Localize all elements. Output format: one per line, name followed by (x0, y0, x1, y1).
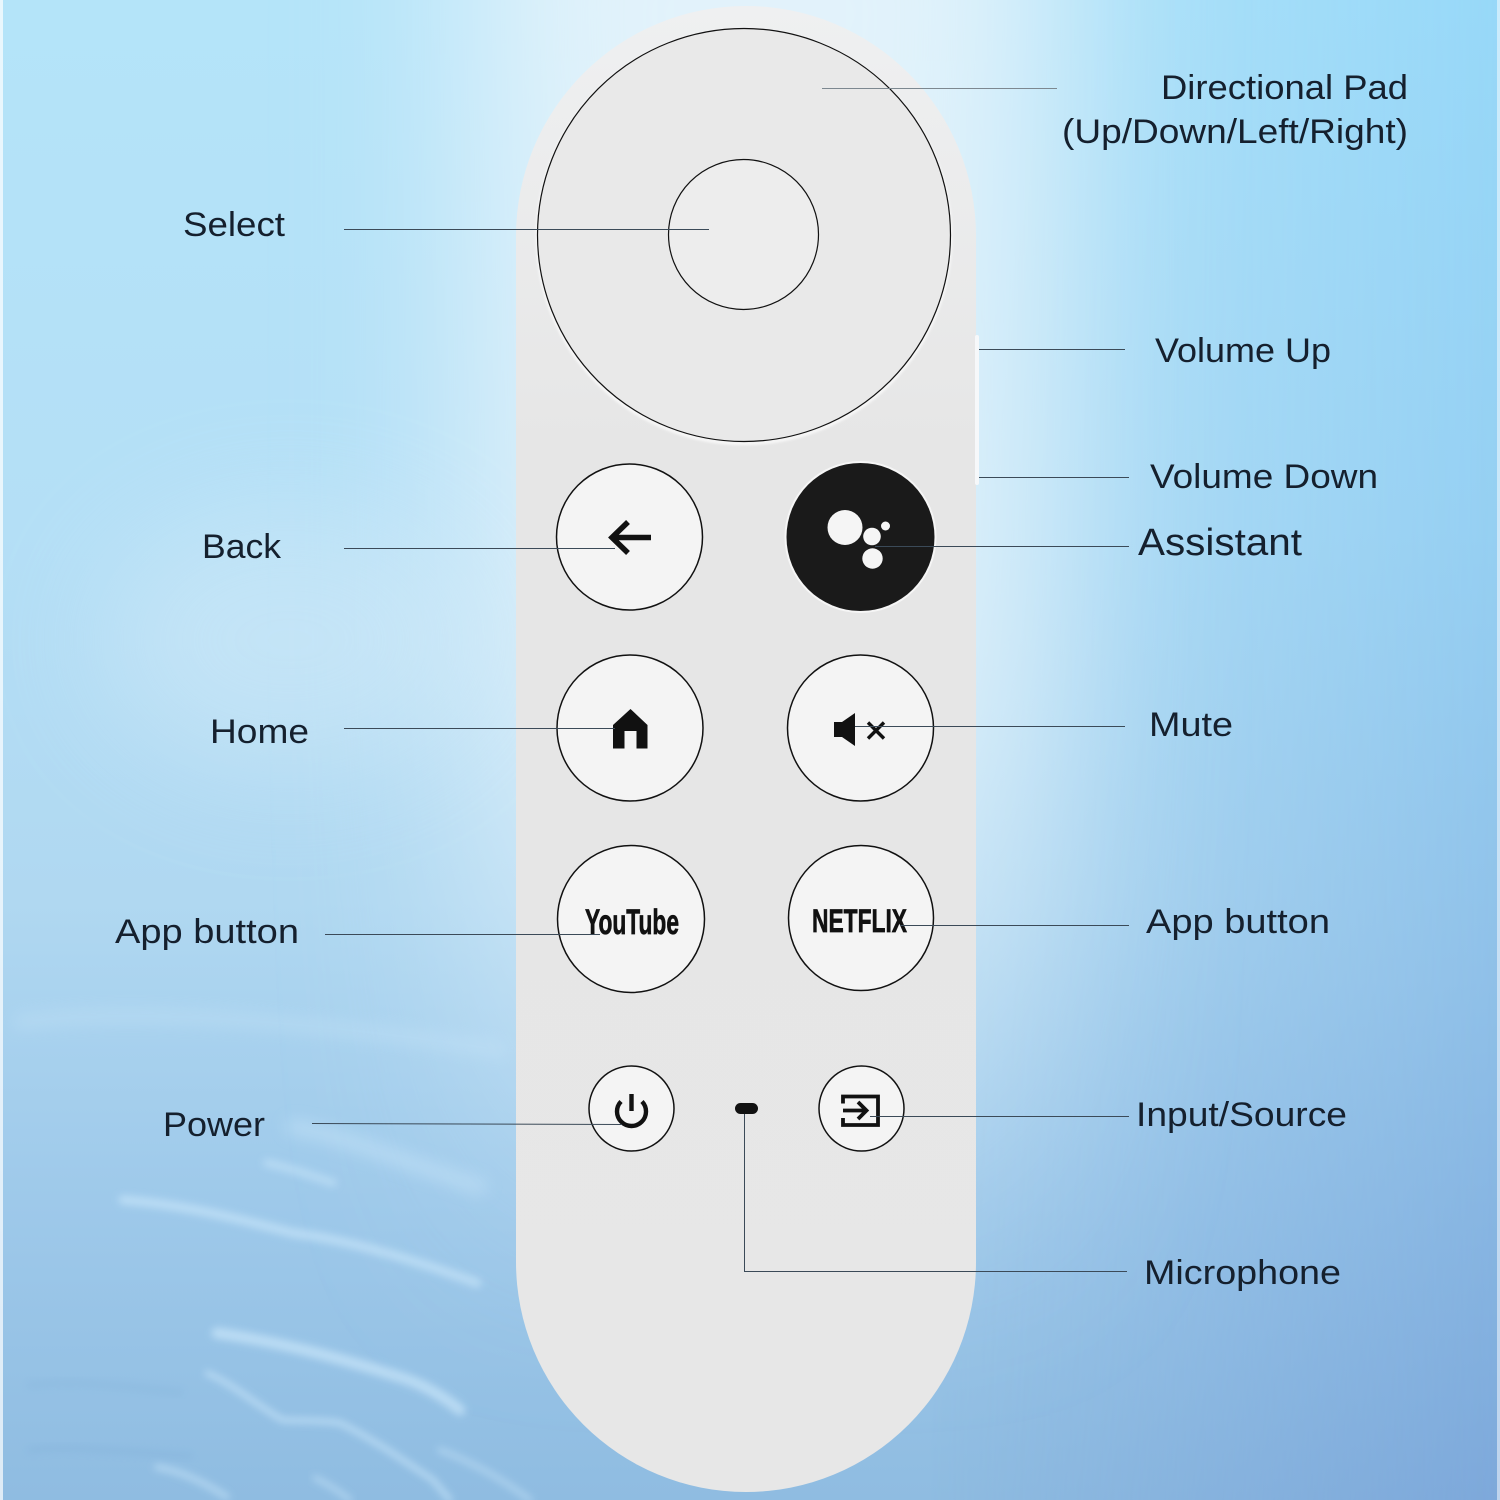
side volume rocker (975, 335, 979, 485)
select button (668, 160, 818, 310)
label: directional pad: (Up/Down/Left/Right) (1062, 113, 1408, 151)
label: mute: Mute (1149, 706, 1233, 744)
leader lines (312, 88, 1129, 1272)
back button (556, 464, 702, 610)
label: microphone: Microphone (1144, 1254, 1341, 1292)
youtube app button (558, 846, 704, 992)
label: directional pad: Directional Pad (1161, 69, 1408, 107)
microphone hole (735, 1103, 758, 1114)
youtube app button: YouTube (585, 903, 679, 942)
home button (557, 655, 703, 801)
label: directional pad (1062, 69, 1408, 151)
netflix app button: NETFLIX (812, 903, 907, 939)
label: home: Home (210, 713, 309, 751)
mute button (788, 655, 934, 801)
label: select: Select (183, 206, 286, 244)
water ripples (20, 1016, 530, 1500)
label: left app button: App button (115, 913, 299, 951)
label: assistant: Assistant (1138, 522, 1302, 564)
input source button (819, 1066, 904, 1151)
assistant button (784, 461, 936, 613)
remote control body (516, 6, 979, 1492)
label: volume down: Volume Down (1150, 458, 1378, 496)
power button (589, 1066, 674, 1151)
label: volume up: Volume Up (1155, 332, 1331, 370)
label: back: Back (202, 528, 282, 566)
label: input source: Input/Source (1136, 1096, 1347, 1134)
label: right app button: App button (1146, 903, 1330, 941)
label: power: Power (163, 1106, 265, 1144)
directional pad (538, 30, 950, 444)
netflix app button (788, 846, 934, 990)
